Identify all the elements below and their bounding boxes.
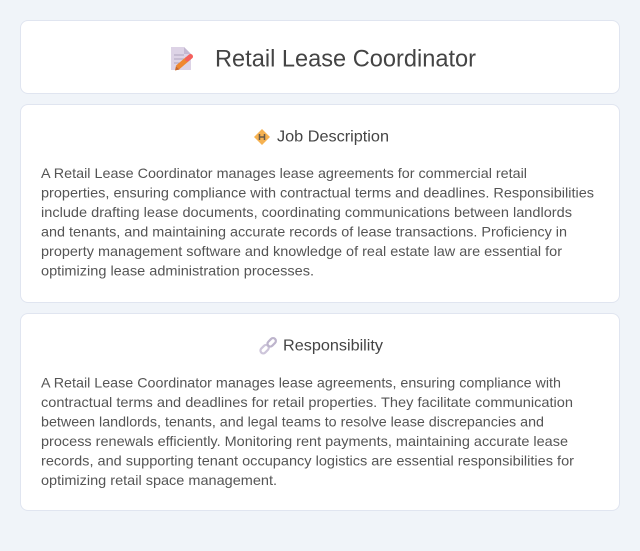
text block: job description: property management software and knowledge of real estate law are essential for xyxy=(41,243,562,259)
text block: job description: include drafting lease documents, coordinating communications between landlords xyxy=(41,204,572,220)
heading: responsibility: Responsibility xyxy=(283,338,383,354)
icon: document with pencil xyxy=(171,47,191,70)
title: Retail Lease Coordinator xyxy=(215,46,476,72)
icon: diamond sign xyxy=(254,129,270,145)
text block: job description: A Retail Lease Coordinator manages lease agreements for commercial retail xyxy=(41,165,527,181)
text block: responsibility: contractual terms and deadlines for retail properties. They facilitate communication xyxy=(41,394,573,410)
text block: responsibility xyxy=(41,374,574,488)
panel: job description card xyxy=(20,104,620,303)
text block: responsibility: records, and supporting tenant occupancy logistics are essential responsibilities for xyxy=(41,452,574,468)
heading: job description: Job Description xyxy=(277,128,389,146)
text block: responsibility: process renewals efficiently. Monitoring rent payments, maintaining accurate lease xyxy=(41,433,568,449)
text block: job description: optimizing lease administration processes. xyxy=(41,262,314,278)
text block: job description xyxy=(41,165,594,278)
text block: responsibility: optimizing retail space management. xyxy=(41,472,277,488)
icon: chain link xyxy=(259,337,277,355)
text block: job description: and tenants, and maintaining accurate records of lease transactions. Proficiency in xyxy=(41,224,567,240)
text block: responsibility: between landlords, tenants, and legal teams to resolve lease discrepancies and xyxy=(41,414,544,430)
text block: responsibility: A Retail Lease Coordinator manages lease agreements, ensuring compliance with xyxy=(41,374,561,390)
panel: title card xyxy=(20,20,620,94)
panel: responsibility card xyxy=(20,313,620,511)
text block: job description: properties, ensuring compliance with contractual terms and deadlines. Responsibilities xyxy=(41,184,594,200)
